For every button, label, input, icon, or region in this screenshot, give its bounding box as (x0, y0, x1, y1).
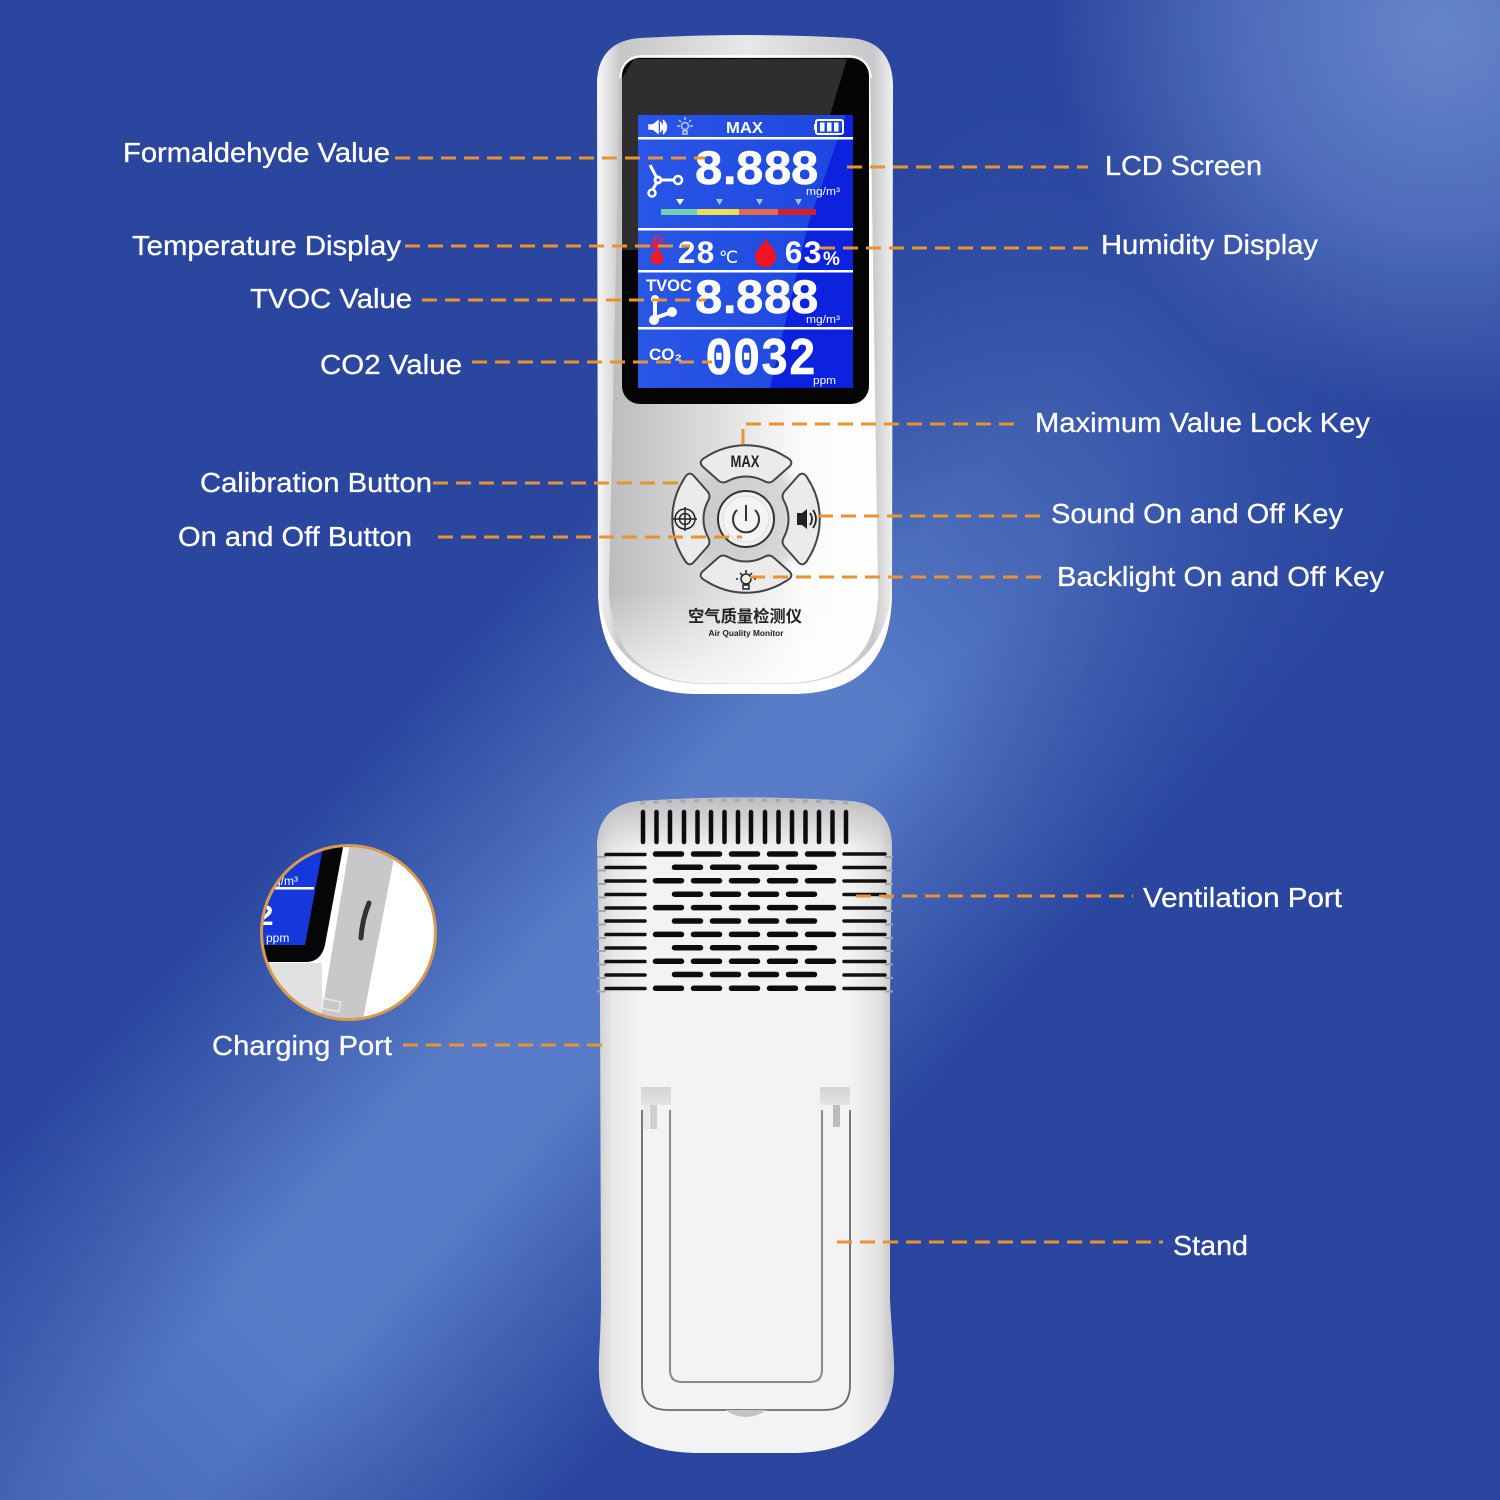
CO2 label: CO₂ (649, 345, 682, 364)
icon: bulb (677, 117, 693, 134)
product name: 空气质量检测仪 (688, 607, 802, 626)
label: Formaldehyde Value: Formaldehyde Value (123, 137, 390, 168)
leader: charging (403, 1044, 603, 1046)
label: CO2 Value: CO2 Value (320, 349, 462, 380)
TVOC reading: 8.888 (694, 272, 819, 328)
leader: sound (818, 514, 1042, 518)
device face (609, 61, 878, 683)
icon: formaldehyde molecule (648, 165, 682, 196)
unit ppm: ppm (813, 375, 836, 387)
leader: ventilation (856, 894, 1133, 898)
inset screen ppm: ppm (266, 931, 289, 945)
leader: LCD screen (847, 166, 1088, 168)
top edge ribs (640, 800, 850, 803)
label: Stand: Stand (1173, 1230, 1248, 1261)
CO2 reading: 0032 (705, 330, 816, 390)
label: Ventilation Port: Ventilation Port (1143, 882, 1342, 913)
unit percent: % (823, 249, 840, 270)
TVOC label: TVOC (646, 276, 692, 295)
device back (597, 798, 894, 1453)
humidity reading: 63 (784, 236, 822, 273)
leader: CO2 (472, 360, 712, 364)
side rib edges (597, 857, 893, 992)
temperature reading: 28 (677, 236, 715, 273)
LCD panel (638, 115, 853, 390)
MAX label: MAX (726, 120, 763, 137)
label: On and Off Button: On and Off Button (178, 521, 412, 552)
leader: maximum key (743, 424, 1022, 444)
back body (597, 798, 894, 1453)
inset: USB port (361, 903, 369, 938)
label: LCD Screen: LCD Screen (1105, 150, 1262, 181)
MAX key: MAX (730, 452, 760, 471)
device front (597, 35, 893, 694)
leader: temperature (405, 244, 690, 248)
side vent bars (606, 854, 885, 988)
inset screen unit: g/m³ (274, 874, 298, 888)
formaldehyde reading: 8.888 (694, 143, 819, 199)
label: TVOC Value: TVOC Value (250, 283, 412, 314)
screen bezel (622, 58, 869, 404)
icon: speaker (649, 120, 666, 134)
level markers (676, 199, 802, 205)
leader: TVOC (422, 298, 706, 302)
sound key (782, 474, 820, 564)
top vent slots (643, 812, 846, 842)
icon: thermometer (648, 236, 668, 264)
leader: humidity (820, 246, 1093, 250)
power button (718, 491, 774, 547)
label: Maximum Value Lock Key: Maximum Value Lock Key (1035, 407, 1370, 438)
unit mg/m3: mg/m³ (806, 314, 840, 326)
icon: TVOC molecule (649, 295, 677, 325)
inset: charging port (256, 842, 440, 1024)
label: Calibration Button: Calibration Button (200, 467, 432, 498)
unit mg/m3: mg/m³ (806, 186, 840, 198)
screen highlight (620, 56, 871, 78)
button cluster (672, 445, 820, 593)
leader: backlight (750, 576, 1043, 578)
backlight key (701, 556, 791, 593)
leader: stand (837, 1240, 1163, 1244)
leader: calibration (433, 482, 685, 484)
label: Temperature Display: Temperature Display (132, 230, 401, 261)
icon: battery (814, 120, 843, 134)
stand (641, 1087, 850, 1417)
leader: on and off (438, 536, 742, 538)
unit celsius: ℃ (719, 248, 738, 267)
label: Charging Port: Charging Port (212, 1030, 392, 1061)
product name English: Air Quality Monitor (708, 629, 784, 638)
rear vent bars (656, 854, 834, 988)
leader: formaldehyde (395, 156, 705, 160)
inset screen digit: 2 (256, 901, 274, 935)
label: Backlight On and Off Key: Backlight On and Off Key (1057, 561, 1384, 592)
MAX key (701, 445, 791, 482)
air quality colour bar (661, 209, 816, 215)
device body (597, 35, 893, 694)
calibration key (672, 474, 710, 564)
label: Sound On and Off Key: Sound On and Off Key (1051, 498, 1343, 529)
label: Humidity Display: Humidity Display (1101, 229, 1318, 260)
icon: humidity drop (755, 239, 776, 268)
